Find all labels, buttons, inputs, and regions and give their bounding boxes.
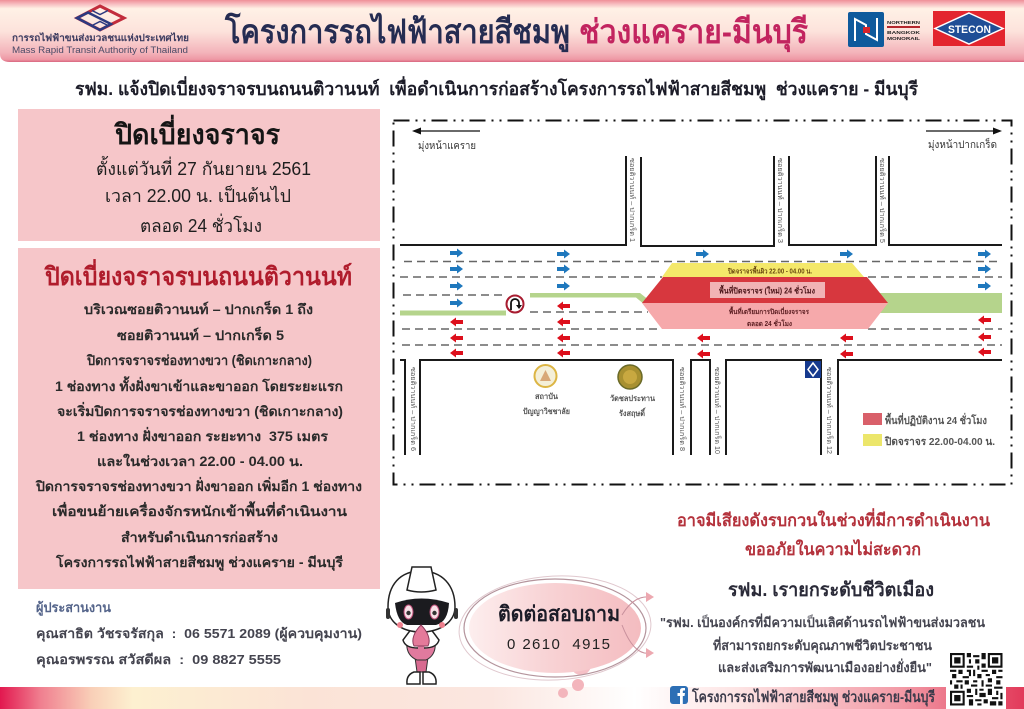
panel: closure dates [18, 109, 380, 241]
details text: 1 ช่องทาง ฝั่งขาออก ระยะทาง 375 เมตร [77, 426, 329, 444]
details text: จะเริ่มปิดการจราจรช่องทางขวา (ชิดเกาะกลาง) [57, 401, 343, 419]
details text: สำหรับดำเนินการก่อสร้าง [121, 530, 278, 545]
apology notice: ขออภัยในความไม่สะดวก [745, 539, 921, 559]
landmark: Wat Chonprathan: วัดชลประทาน [610, 394, 655, 403]
Northern Bangkok Monorail logo: NORTHERN [887, 20, 920, 25]
closure duration: ตลอด 24 ชั่วโมง [140, 213, 262, 236]
panel: closure details [18, 248, 380, 589]
direction: toward Khae Rai [412, 128, 480, 152]
street labels: ซอยติวานนท์ – ปากเกร็ด 10 [713, 367, 722, 454]
details text: บริเวณซอยติวานนท์ – ปากเกร็ด 1 ถึง [84, 300, 313, 317]
street labels: ซอยติวานนท์ – ปากเกร็ด 1 [628, 158, 637, 242]
MRTA mission quote: "รฟม. เป็นองค์กรที่มีความเป็นเลิศด้านรถไฟฟ้าขนส่งมวลชน [660, 613, 985, 630]
STECON logo: STECON [948, 24, 991, 36]
street labels [409, 158, 887, 454]
closure zone: ปิดจราจรพื้นผิว 22.00 - 04.00 น. [727, 264, 812, 276]
header title: ช่วงแคราย-มีนบุรี [579, 13, 808, 53]
landmark: Wat Chonprathan: รังสฤษดิ์ [619, 407, 646, 418]
closure time: เวลา 22.00 น. เป็นต้นไป [105, 184, 291, 206]
mascot helmet [388, 571, 455, 632]
legend: ปิดจราจร 22.00-04.00 น. [884, 436, 995, 448]
mascot body [407, 637, 435, 660]
bottom gradient strip [0, 687, 1024, 709]
header title [224, 12, 808, 53]
red traffic arrows [450, 302, 991, 358]
direction: toward Pak Kret [926, 128, 1002, 151]
QR code [946, 651, 1006, 709]
details text: และในช่วงเวลา 22.00 - 04.00 น. [97, 453, 303, 469]
STECON logo [933, 11, 1005, 46]
details text: โครงการรถไฟฟ้าสายสีชมพู ช่วงแคราย - มีนบุรี [55, 553, 344, 571]
MRTA slogan: รฟม. เรายกระดับชีวิตเมือง [728, 579, 934, 601]
street labels: ซอยติวานนท์ – ปากเกร็ด 6 [409, 367, 418, 451]
green median [400, 293, 1002, 316]
street labels: ซอยติวานนท์ – ปากเกร็ด 5 [878, 158, 887, 243]
yellow zone [662, 263, 864, 277]
details heading: ปิดเบี่ยงจราจรบนถนนติวานนท์ [44, 259, 352, 291]
red zone [642, 277, 888, 303]
subtitle: รฟม. แจ้งปิดเบี่ยงจราจรบนถนนติวานนท์ เพื่อดำเนินการก่อสร้างโครงการรถไฟฟ้าสายสีชมพู ช่วงแคราย - มีนบุรี [75, 76, 918, 101]
details text: ซอยติวานนท์ – ปากเกร็ด 5 [117, 326, 285, 343]
icon: U-turn sign [506, 296, 524, 312]
icon: Bangkok Bank [805, 361, 821, 378]
header band [0, 0, 1024, 62]
blue traffic arrows [450, 248, 991, 308]
details text: ปิดการจราจรช่องทางขวา ฝั่งขาออก เพิ่มอีก 1 ช่องทาง [35, 476, 362, 494]
landmark: Panyapiwat institute: ปัญญาวิชชาลัย [523, 407, 570, 417]
Northern Bangkok Monorail logo [848, 12, 921, 47]
panel heading: ปิดเบี่ยงจราจร [113, 114, 280, 150]
lane dashes [400, 262, 1002, 345]
landmark: Wat Chonprathan [610, 365, 655, 418]
apology notice: อาจมีเสียงดังรบกวนในช่วงที่มีการดำเนินงาน [677, 508, 990, 530]
mascot hands [413, 625, 429, 646]
mascot [386, 567, 458, 684]
landmark: Panyapiwat institute [523, 365, 570, 417]
details text [35, 300, 362, 571]
MRTA mission quote: และส่งเสริมการพัฒนาเมืองอย่างยั่งยืน" [718, 658, 932, 675]
facebook link: โครงการรถไฟฟ้าสายสีชมพู ช่วงแคราย-มีนบุรี [691, 687, 936, 707]
closure zone: พื้นที่ปิดจราจร (ใหม่) 24 ชั่วโมง [719, 284, 815, 296]
Northern Bangkok Monorail logo: MONORAIL [887, 36, 920, 41]
details text: 1 ช่องทาง ทั้งฝั่งขาเข้าและขาออก โดยระยะแรก [55, 376, 343, 394]
direction: toward Pak Kret: มุ่งหน้าปากเกร็ด [928, 137, 997, 151]
MRTA logo [12, 6, 189, 55]
street labels: ซอยติวานนท์ – ปากเกร็ด 12 [825, 367, 834, 454]
contact oval [456, 571, 654, 698]
street labels: ซอยติวานนท์ – ปากเกร็ด 8 [678, 367, 687, 451]
mascot visor [395, 598, 449, 625]
MRTA mission quote: ที่สามารถยกระดับคุณภาพชีวิตประชาชน [713, 636, 932, 654]
header title: โครงการรถไฟฟ้าสายสีชมพู [224, 12, 570, 53]
details text: เพื่อขนย้ายเครื่องจักรหนักเข้าพื้นที่ดำเนินงาน [52, 501, 348, 519]
traffic map [394, 120, 1012, 484]
landmark: Panyapiwat institute: สถาบัน [535, 392, 558, 401]
mascot eyes [404, 605, 413, 619]
contact number: 0 2610 4915 [507, 636, 610, 653]
apology notice [677, 508, 990, 559]
closure zone [642, 263, 888, 329]
mascot arms [403, 628, 439, 648]
street labels: ซอยติวานนท์ – ปากเกร็ด 3 [776, 158, 785, 243]
contact coordinators: ผู้ประสานงาน [36, 600, 111, 616]
MRTA logo: การรถไฟฟ้าขนส่งมวลชนแห่งประเทศไทย [12, 32, 189, 44]
MRTA logo: Mass Rapid Transit Authority of Thailand [12, 45, 188, 55]
contact heading: ติดต่อสอบถาม [498, 603, 620, 626]
red zone label [710, 282, 825, 298]
contact coordinators [36, 600, 362, 668]
details text: ปิดการจราจรช่องทางขวา (ชิดเกาะกลาง) [86, 353, 312, 368]
legend [863, 412, 995, 448]
mascot legs [414, 650, 429, 672]
closure zone: พื้นที่เตรียมการปิดเบี่ยงจราจร [729, 305, 809, 316]
bubbles [571, 655, 591, 675]
Northern Bangkok Monorail logo: BANGKOK [887, 30, 921, 35]
pink zone [642, 303, 888, 329]
contact coordinators: คุณสาธิต วัชรจรัสกุล : 06 5571 2089 (ผู้ควบคุมงาน) [36, 626, 362, 642]
MRTA mission quote [660, 613, 985, 675]
contact coordinators: คุณอรพรรณ สวัสดีผล : 09 8827 5555 [36, 652, 281, 668]
facebook link [670, 686, 936, 707]
legend: พื้นที่ปฏิบัติงาน 24 ชั่วโมง [885, 412, 987, 427]
closure zone: ตลอด 24 ชั่วโมง [747, 318, 793, 328]
closure date: ตั้งแต่วันที่ 27 กันยายน 2561 [96, 156, 311, 179]
direction: toward Khae Rai: มุ่งหน้าแคราย [418, 140, 476, 152]
road edges [400, 156, 1002, 455]
